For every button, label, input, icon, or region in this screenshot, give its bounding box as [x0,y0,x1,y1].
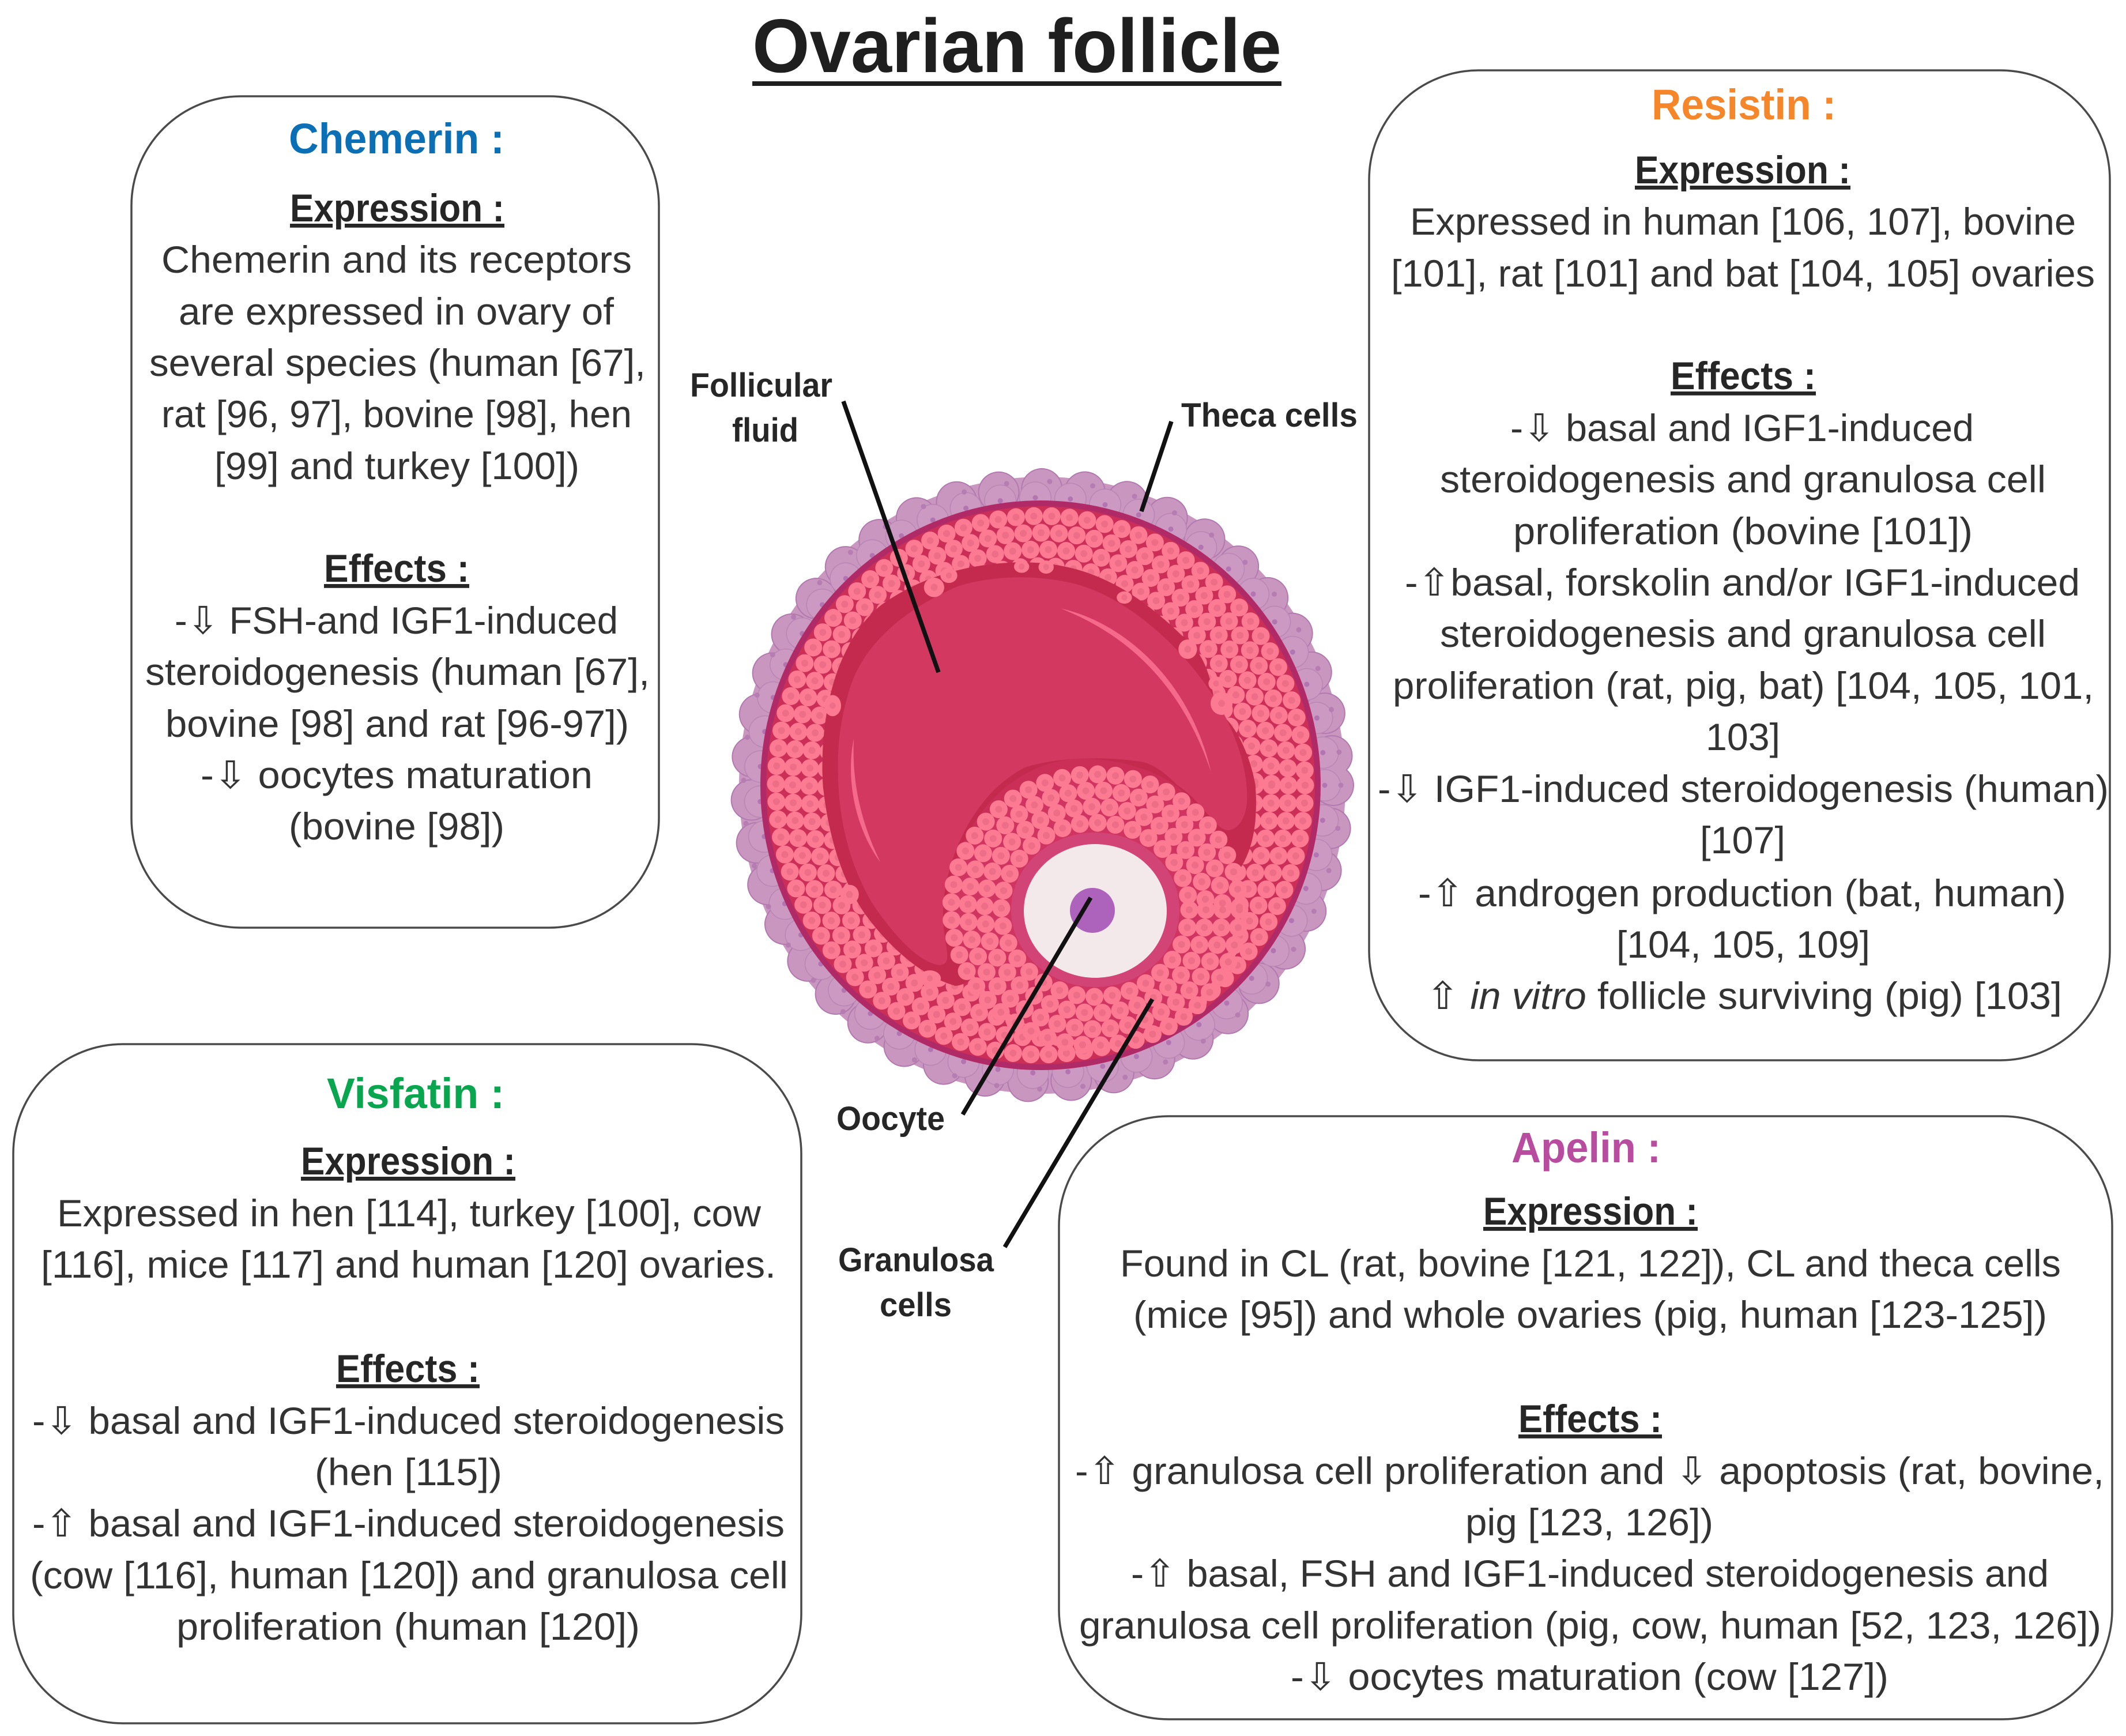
text block: visfatin expression: Expressed in hen [114], turkey [100], cow [57,1192,761,1234]
text block: resistin effects: -⇩ IGF1-induced steroidogenesis (human) [1378,767,2109,810]
text block: apelin effects: -⇧ granulosa cell proliferation and ⇩ apoptosis (rat, bovine, [1075,1449,2104,1492]
text block: resistin effects [1378,354,2109,1017]
text block: resistin expression: Expressed in human [106, 107], bovine [1410,200,2076,243]
text block: visfatin effects: (hen [115]) [315,1451,502,1493]
text block: chemerin effects [145,547,650,848]
follicular fluid antrum [822,560,1256,986]
basement membrane [760,500,1321,1070]
text block: resistin effects: 103] [1706,716,1780,758]
text block: chemerin expression: [99] and turkey [100]) [214,445,579,487]
pointer: follicular fluid [843,401,938,672]
text block: chemerin expression [149,186,646,487]
text block: apelin effects [1075,1397,2104,1698]
text block: chemerin effects: (bovine [98]) [289,805,504,848]
panel: apelin [1059,1116,2112,1719]
text block: visfatin expression: Expression : [301,1139,515,1183]
text block: resistin effects: Effects : [1671,354,1816,398]
label: theca cells: Theca cells [1181,397,1358,434]
text block: apelin expression: Found in CL (rat, bovine [121, 122]), CL and theca cells [1120,1242,2061,1285]
text block: resistin effects: [104, 105, 109] [1616,923,1870,966]
granulosa cell layer [766,506,1315,1064]
text block: resistin expression [1391,148,2095,295]
text block: visfatin effects [30,1347,788,1648]
oocyte [1024,844,1167,978]
text block: chemerin expression: rat [96, 97], bovine [98], hen [161,393,632,435]
text block: apelin expression [1120,1189,2061,1336]
label: follicular fluid: fluid [732,412,798,449]
zona pellucida [1011,833,1179,987]
label: granulosa cells: cells [880,1286,952,1324]
text block: chemerin expression: several species (human [67], [149,341,646,384]
label: follicular fluid: Follicular [690,367,832,404]
theca cell layer [739,477,1345,1094]
text block: apelin effects: Effects : [1518,1397,1662,1441]
text block: resistin effects: proliferation (rat, pig, bat) [104, 105, 101, [1393,664,2094,707]
text block: visfatin expression: [116], mice [117] and human [120] ovaries. [41,1243,776,1286]
label: granulosa cells: Granulosa [838,1241,994,1279]
text block: visfatin effects: proliferation (human [120]) [176,1605,640,1648]
text block: apelin expression: (mice [95]) and whole ovaries (pig, human [123-125]) [1133,1293,2047,1336]
diagram: ovarian follicle [739,477,1345,1094]
text block: visfatin effects: -⇩ basal and IGF1-induced steroidogenesis [32,1399,785,1442]
oocyte nucleus [1070,888,1115,933]
panel: chemerin [131,96,659,928]
text block: resistin expression: Expression : [1635,148,1850,192]
title: Ovarian follicle [752,3,1281,88]
text block: apelin effects: pig [123, 126]) [1465,1501,1713,1543]
text block: apelin effects: -⇩ oocytes maturation (cow [127]) [1291,1655,1888,1698]
text block: visfatin effects: -⇧ basal and IGF1-induced steroidogenesis [32,1502,785,1545]
text block: chemerin effects: steroidogenesis (human [67], [145,650,650,693]
pointer: theca cells [1141,421,1171,511]
heading: chemerin: Chemerin : [289,115,504,163]
cumulus cells [951,774,1239,1045]
label: follicular fluid [690,367,832,449]
text block: chemerin effects: bovine [98] and rat [96-97]) [165,702,629,745]
text block: resistin effects: steroidogenesis and granulosa cell [1440,458,2046,500]
text block: resistin effects: -⇧basal, forskolin and/or IGF1-induced [1405,561,2080,604]
pointer: oocyte [963,898,1091,1114]
label: granulosa cells [838,1241,994,1324]
panel: resistin [1369,70,2110,1060]
text block: resistin effects: proliferation (bovine [101]) [1513,510,1973,552]
text block: apelin expression: Expression : [1483,1189,1698,1233]
text block: apelin effects: -⇧ basal, FSH and IGF1-induced steroidogenesis and [1131,1552,2049,1595]
text block: visfatin effects: (cow [116], human [120]) and granulosa cell [30,1554,788,1596]
text block: visfatin expression [41,1139,776,1286]
label: oocyte: Oocyte [836,1100,945,1138]
text block: resistin effects: -⇩ basal and IGF1-induced [1510,406,1974,449]
text block: apelin effects: granulosa cell proliferation (pig, cow, human [52, 123, 126]) [1079,1604,2101,1647]
text block: visfatin effects: Effects : [336,1347,480,1391]
text block: chemerin effects: Effects : [324,547,469,590]
heading: resistin: Resistin : [1652,81,1836,129]
text block: chemerin effects: -⇩ oocytes maturation [201,754,593,796]
panel: visfatin [13,1044,801,1723]
text block: chemerin effects: -⇩ FSH-and IGF1-induced [175,599,618,642]
text block: chemerin expression: Chemerin and its receptors [161,238,632,281]
heading: apelin: Apelin : [1511,1124,1661,1172]
text block: resistin effects: steroidogenesis and granulosa cell [1440,612,2046,655]
pointer: granulosa cells [1005,999,1152,1247]
text block: chemerin expression: Expression : [290,186,504,230]
heading: visfatin: Visfatin : [327,1070,504,1117]
text block: resistin effects: [107] [1700,819,1785,861]
text block: resistin effects: ⇧ in vitro follicle surviving (pig) [103] [1426,974,2062,1017]
text block: resistin effects: -⇧ androgen production (bat, human) [1418,872,2066,914]
text block: resistin expression: [101], rat [101] and bat [104, 105] ovaries [1391,252,2095,295]
text block: chemerin expression: are expressed in ovary of [179,290,615,333]
